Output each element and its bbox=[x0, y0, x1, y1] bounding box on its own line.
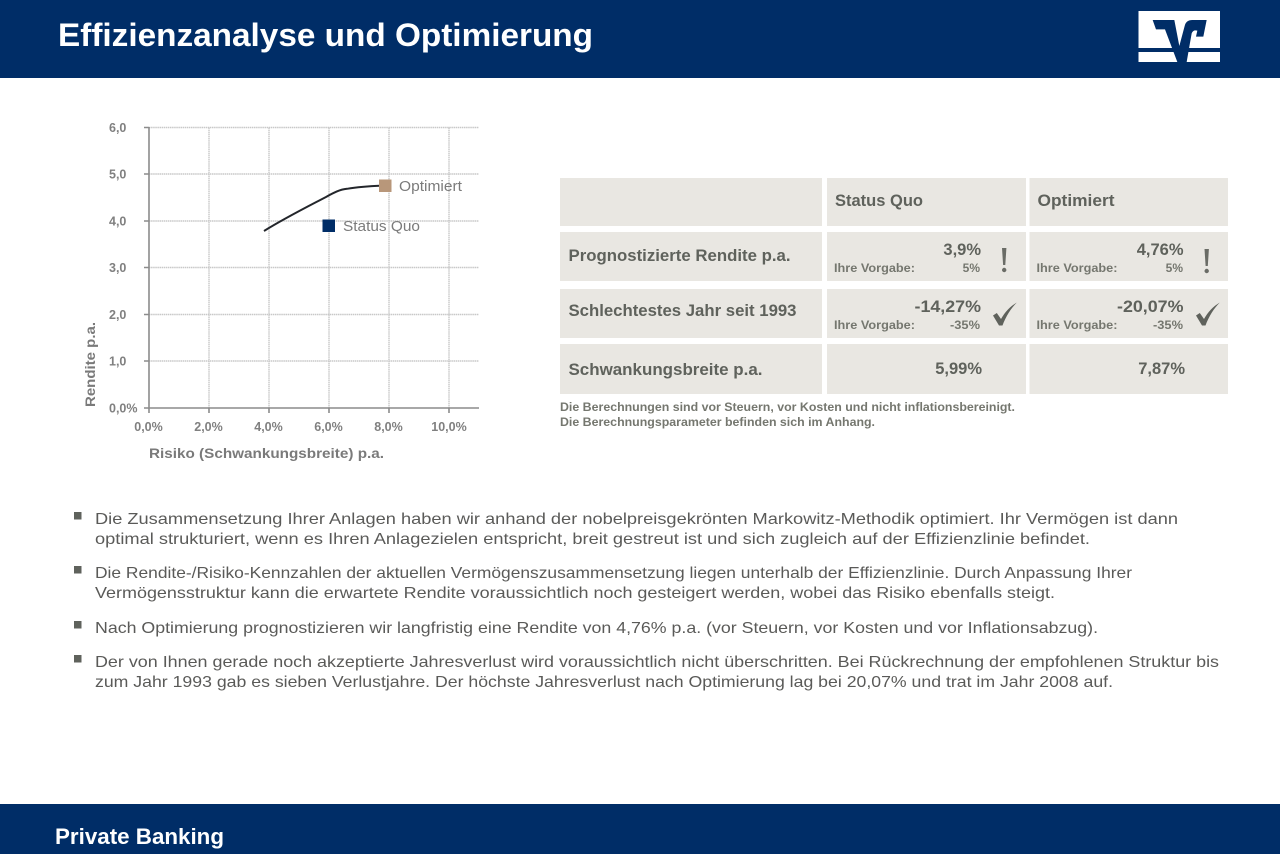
header row: Status Quo bbox=[835, 192, 923, 210]
y axis values: 2,0 bbox=[109, 308, 126, 322]
y axis values bbox=[109, 121, 138, 416]
row: Schwankungsbreite bbox=[560, 344, 1228, 394]
row: Schlechtestes Jahr: -20,07% bbox=[1117, 298, 1184, 316]
row: Schwankungsbreite: Schwankungsbreite p.a. bbox=[568, 361, 762, 379]
x axis title: Risiko (Schwankungsbreite) p.a. bbox=[149, 445, 384, 461]
x axis values: 8,0% bbox=[374, 420, 403, 434]
bullet 3: Nach Optimierung prognostizieren wir langfristig eine Rendite von 4,76% p.a. (vor Steuern, vor Kosten und vor Inflationsabzug). bbox=[95, 620, 1098, 637]
y axis values: 0,0% bbox=[109, 402, 138, 416]
x axis values: 2,0% bbox=[194, 420, 223, 434]
row: Schlechtestes Jahr: Ihre Vorgabe: bbox=[834, 318, 915, 332]
bullet 4: zum Jahr 1993 gab es sieben Verlustjahre. Der höchste Jahresverlust nach Optimierung lag bei 20,07% und trat im Jahr 2008 auf. bbox=[95, 674, 1113, 691]
x axis values: 4,0% bbox=[254, 420, 283, 434]
footer label: Private Banking bbox=[55, 824, 224, 849]
efficiency curve bbox=[264, 186, 385, 231]
marker: Optimiert: Optimiert bbox=[399, 179, 462, 195]
row: Schlechtestes Jahr: -35% bbox=[1153, 318, 1183, 332]
bullet 4 bbox=[74, 654, 1219, 691]
bullet 1: Die Zusammensetzung Ihrer Anlagen haben wir anhand der nobelpreisgekrönten Markowitz-Methodik optimiert. Ihr Vermögen ist dann bbox=[95, 511, 1178, 528]
row: Schlechtestes Jahr: -35% bbox=[950, 318, 980, 332]
row: Prognostizierte Rendite: 3,9% bbox=[943, 241, 981, 259]
row: Schlechtestes Jahr: Schlechtestes Jahr seit 1993 bbox=[568, 302, 796, 320]
bullet list bbox=[74, 511, 1219, 691]
header band bbox=[0, 0, 1280, 78]
bullet 1 bbox=[74, 511, 1178, 548]
row: Prognostizierte Rendite: Ihre Vorgabe: bbox=[1036, 261, 1118, 275]
x axis values: 6,0% bbox=[314, 420, 343, 434]
y axis title: Rendite p.a. bbox=[82, 322, 98, 407]
y axis values: 5,0 bbox=[109, 168, 126, 182]
footer band bbox=[0, 804, 1280, 854]
bullet 2: Die Rendite-/Risiko-Kennzahlen der aktuellen Vermögenszusammensetzung liegen unterhalb der Effizienzlinie. Durch Anpassung Ihrer bbox=[95, 565, 1133, 582]
y axis values: 4,0 bbox=[109, 214, 126, 228]
x axis values: 0,0% bbox=[134, 420, 163, 434]
row: Schlechtestes Jahr: -14,27% bbox=[914, 298, 981, 316]
row: Prognostizierte Rendite bbox=[560, 232, 1228, 281]
bullet 2: Vermögensstruktur kann die erwartete Rendite voraussichtlich noch gesteigert werden, wobei das Risiko ebenfalls steigt. bbox=[95, 585, 1055, 602]
header row: Optimiert bbox=[1038, 192, 1115, 210]
y axis values: 1,0 bbox=[109, 354, 126, 368]
marker: Status Quo: Status Quo bbox=[343, 219, 420, 235]
bullet 2 bbox=[74, 565, 1133, 602]
chart: efficiency line bbox=[82, 121, 479, 461]
row: Prognostizierte Rendite: 5% bbox=[1166, 261, 1183, 275]
header row bbox=[560, 178, 1228, 226]
row: Prognostizierte Rendite: Ihre Vorgabe: bbox=[834, 261, 915, 275]
row: Schlechtestes Jahr: Ihre Vorgabe: bbox=[1036, 318, 1118, 332]
icon: exclamation bbox=[1204, 249, 1209, 273]
row: Prognostizierte Rendite: 4,76% bbox=[1137, 241, 1184, 259]
icon: bank logo bbox=[1138, 11, 1220, 62]
bullet 1: optimal strukturiert, wenn es Ihren Anlagezielen entspricht, breit gestreut ist und sich zugleich auf der Effizienzlinie befindet. bbox=[95, 531, 1090, 548]
table footnote bbox=[560, 400, 1015, 429]
grid lines bbox=[149, 128, 479, 408]
row: Schlechtestes Jahr bbox=[560, 289, 1228, 338]
row: Schwankungsbreite: 7,87% bbox=[1138, 360, 1185, 378]
row: Prognostizierte Rendite: Prognostizierte Rendite p.a. bbox=[568, 247, 790, 265]
title: Effizienzanalyse und Optimierung bbox=[58, 17, 593, 53]
icon: check mark bbox=[1196, 302, 1220, 326]
x axis values bbox=[134, 420, 467, 434]
row: Schwankungsbreite: 5,99% bbox=[935, 360, 982, 378]
row: Prognostizierte Rendite: 5% bbox=[963, 261, 980, 275]
comparison table bbox=[560, 178, 1228, 394]
y axis values: 3,0 bbox=[109, 261, 126, 275]
table footnote: Die Berechnungsparameter befinden sich im Anhang. bbox=[560, 415, 875, 429]
icon: exclamation bbox=[1002, 248, 1006, 272]
y axis values: 6,0 bbox=[109, 121, 126, 135]
x axis values: 10,0% bbox=[431, 420, 467, 434]
table footnote: Die Berechnungen sind vor Steuern, vor Kosten und nicht inflationsbereinigt. bbox=[560, 400, 1015, 414]
bullet 4: Der von Ihnen gerade noch akzeptierte Jahresverlust wird voraussichtlich nicht überschritten. Bei Rückrechnung der empfohlenen Struktur bis bbox=[95, 654, 1219, 671]
icon: check mark bbox=[993, 302, 1017, 326]
axes bbox=[144, 127, 479, 413]
